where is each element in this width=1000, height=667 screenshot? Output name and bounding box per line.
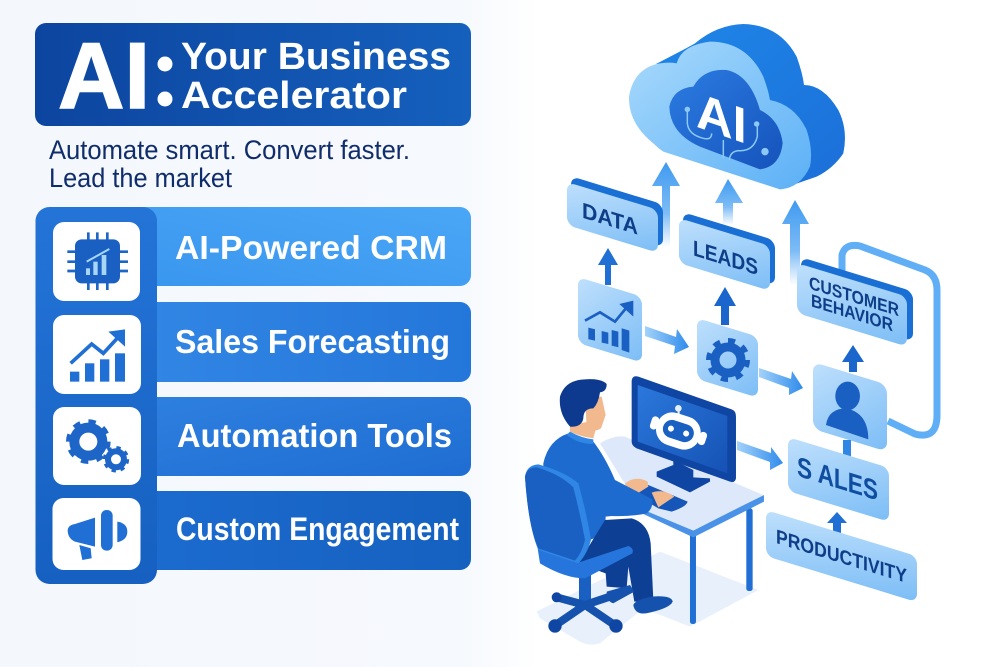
card: CUSTOMER BEHAVIOR: CUSTOMER (809, 272, 899, 320)
cloud circuit lines (685, 107, 768, 160)
keyboard (627, 485, 688, 512)
hands (625, 479, 674, 507)
subtitle: Lead the market (49, 163, 232, 193)
card: DATA (567, 175, 663, 254)
icon column (36, 207, 157, 584)
tile: chart (578, 277, 642, 363)
torso (543, 433, 652, 540)
card: PRODUCTIVITY: PRODUCTIVITY (776, 525, 907, 588)
shoes (607, 585, 673, 614)
card: CUSTOMER BEHAVIOR: BEHAVIOR (811, 290, 893, 335)
bar: AI-Powered CRM (130, 207, 471, 286)
card: LEADS (679, 211, 775, 292)
title: Your Business: Your Business (181, 36, 451, 78)
subtitle: Automate smart. Convert faster. (49, 135, 410, 165)
connector: person to sales (843, 440, 851, 460)
illustration: person on chair (525, 379, 688, 633)
bar: Sales Forecasting: Sales Forecasting (175, 323, 450, 360)
arrow: monitor to sales (737, 441, 783, 470)
icon: megaphone (52, 498, 140, 570)
arrow: person to behavior (842, 345, 864, 372)
chart glyph (585, 301, 633, 353)
icon: AI chip (53, 222, 140, 301)
card: SALES (788, 437, 889, 522)
feedback loop (842, 245, 937, 435)
legs (578, 518, 653, 602)
floor shadow (537, 552, 758, 645)
arrow: chart to data (598, 248, 618, 285)
collar (567, 432, 593, 444)
icon: gears (53, 407, 141, 485)
chair back (525, 464, 591, 563)
title: colon (158, 56, 172, 106)
robot icon (646, 405, 711, 456)
arrow: behavior to cloud (782, 200, 809, 285)
cloud face (629, 42, 811, 189)
subtitle (49, 135, 410, 193)
arrow: gear to leads (714, 287, 736, 325)
chair base (548, 575, 623, 633)
person glyph (826, 382, 868, 439)
gear glyph (709, 341, 747, 379)
cloud depth (656, 24, 845, 189)
AI cloud (629, 24, 845, 189)
bar: AI-Powered CRM: AI-Powered CRM (175, 229, 447, 266)
arrow: leads to cloud (715, 179, 743, 225)
cloud emblem (669, 70, 783, 169)
monitor (632, 376, 736, 492)
head (560, 379, 607, 438)
bar: Custom Engagement (130, 491, 471, 570)
bar: Automation Tools (130, 397, 471, 476)
bar: Sales Forecasting (130, 302, 471, 382)
arrow: chart to gear (645, 326, 689, 354)
card: SALES: S ALES (797, 451, 878, 507)
title banner (35, 23, 471, 128)
arrow: productivity to sales (827, 512, 847, 536)
card: LEADS: LEADS (693, 236, 758, 280)
card: DATA: DATA (582, 198, 638, 240)
card: PRODUCTIVITY (766, 510, 917, 602)
illustration: desk scene (537, 376, 764, 645)
icon: growth chart (53, 315, 141, 394)
cloud AI text: AI (696, 81, 747, 155)
arrow: gear to person (759, 368, 803, 395)
bar: Automation Tools: Automation Tools (177, 417, 452, 454)
title: Accelerator: Accelerator (181, 75, 407, 117)
bar: Custom Engagement: Custom Engagement (176, 511, 459, 547)
tile: gear (697, 318, 758, 398)
title: AI: AI (58, 23, 150, 128)
tile: person (813, 362, 887, 452)
card: CUSTOMER BEHAVIOR (797, 256, 913, 348)
desk (600, 436, 764, 624)
chair seat (538, 546, 633, 578)
arrow: data to cloud (652, 162, 680, 247)
